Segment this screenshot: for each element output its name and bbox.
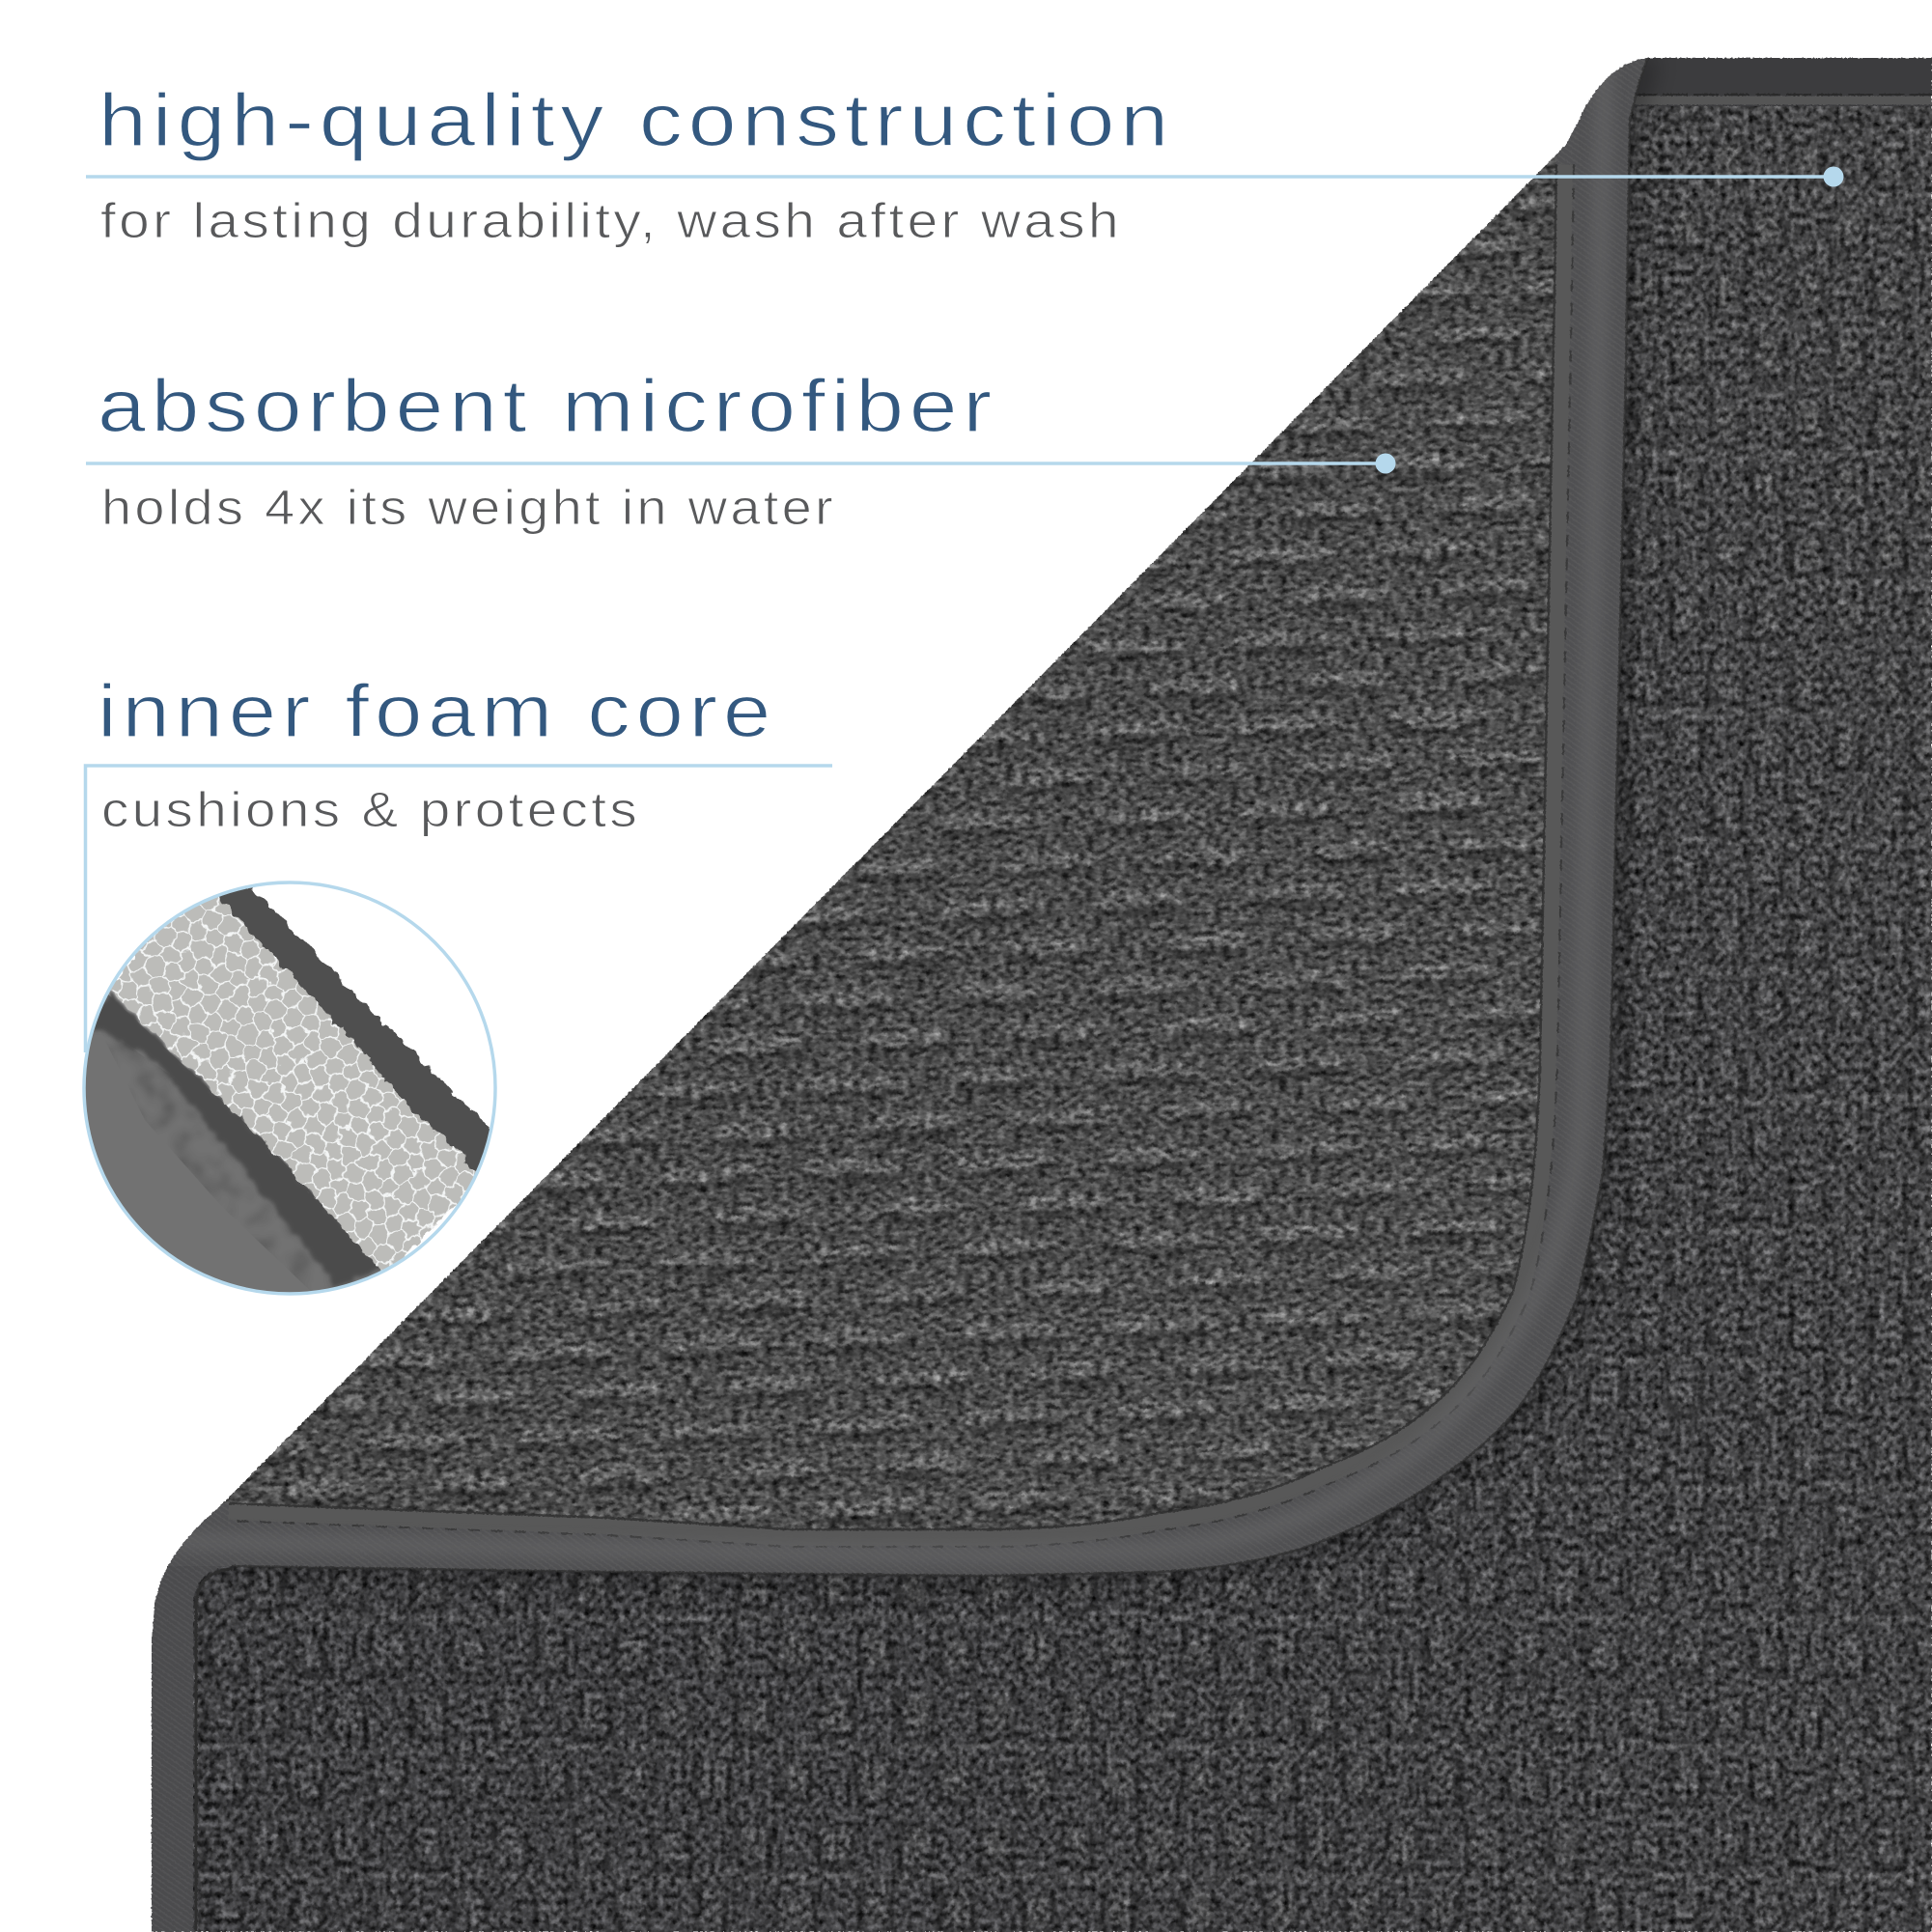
leader line <box>86 175 1834 179</box>
flap piping <box>229 164 1556 1529</box>
flap microfiber fabric <box>0 0 1641 1641</box>
foam core <box>58 850 521 1313</box>
binding stitching <box>229 164 1556 1529</box>
lower layer left binding <box>151 1487 239 1932</box>
binding twill weave <box>0 0 1738 1641</box>
leader line <box>86 462 1386 465</box>
lower band shape <box>93 989 382 1286</box>
magnifier contents <box>58 850 521 1313</box>
binding highlight along the bend <box>174 58 1605 1554</box>
subtext: cushions & protects <box>101 782 640 837</box>
heading: high-quality construction <box>98 79 1174 162</box>
lower layer top stitch line <box>1632 94 1932 96</box>
callout: high-quality construction <box>86 79 1844 248</box>
flap fabric ribs <box>0 0 1641 1641</box>
lower fabric dark blotches <box>58 850 521 1313</box>
flap fabric base colour <box>0 0 1641 1641</box>
upper dark binding edge <box>214 886 492 1176</box>
leader dot <box>1375 454 1396 473</box>
subtext: for lasting durability, wash after wash <box>100 193 1122 248</box>
flap seam line <box>229 164 1556 1529</box>
subtext: holds 4x its weight in water <box>101 480 836 535</box>
heading: absorbent microfiber <box>98 365 997 448</box>
lower gray fabric <box>77 993 406 1313</box>
foam cell walls <box>58 850 521 1313</box>
leader dot <box>1823 166 1844 187</box>
flap fabric terry noise <box>0 0 1641 1641</box>
flap cast shadow <box>232 58 1648 1576</box>
folded flap binding <box>0 0 1738 1641</box>
magnifier ring <box>84 882 495 1294</box>
flap outer edge line <box>232 58 1648 1576</box>
callout: absorbent microfiber <box>86 365 1396 535</box>
heading: inner foam core <box>98 670 776 753</box>
blotch texture <box>58 850 521 1313</box>
callout: inner foam core <box>58 670 832 1313</box>
lower dark binding edge <box>93 989 382 1286</box>
lower layer left stitching <box>196 1569 232 1932</box>
lower layer top piping <box>1632 97 1932 104</box>
bracket leader line <box>85 766 832 1052</box>
mat base binding <box>152 58 1932 1641</box>
foam cell fill <box>58 850 521 1313</box>
foam cross-section magnifier <box>58 850 521 1313</box>
left binding weave <box>145 1487 251 1932</box>
binding fill <box>0 0 1738 1641</box>
magnifier white fill <box>84 882 495 1294</box>
